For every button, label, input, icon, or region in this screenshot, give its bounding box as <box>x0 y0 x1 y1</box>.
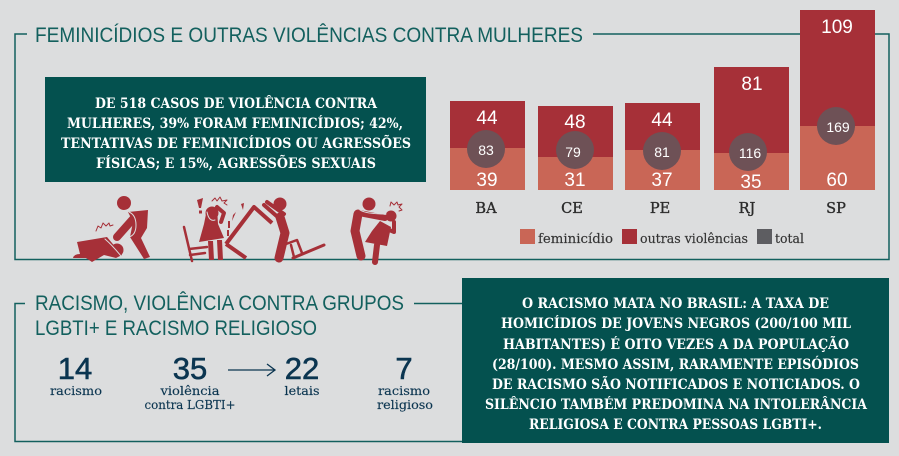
heading: feminicídios: FEMINICÍDIOS E OUTRAS VIOLÊNCIAS CONTRA MULHERES <box>35 24 583 47</box>
callout: o racismo mata: (28/100). MESMO ASSIM, RARAMENTE EPISÓDIOS <box>492 356 859 373</box>
stat: violência contra LGBTI+: contra LGBTI+ <box>144 397 236 412</box>
stat: racismo religioso: racismo <box>378 383 430 398</box>
bar: SP: 60 <box>826 170 848 191</box>
bar: BA: BA <box>475 201 497 217</box>
callout: o racismo mata: HABITANTES) É OITO VEZES A DA POPULAÇÃO <box>503 337 849 353</box>
arrow <box>228 364 275 376</box>
heading: racismo <box>35 292 404 340</box>
legend: feminicídio <box>538 232 613 247</box>
bar: BA: 83 <box>478 142 494 158</box>
stat: letais: letais <box>284 383 320 398</box>
callout: o racismo mata: DE RACISMO SÃO NOTIFICADOS E NOTICIADOS. O <box>492 377 860 393</box>
stat: racismo: racismo <box>50 383 102 398</box>
callout: 518 casos: MULHERES, 39% FORAM FEMINICÍDIOS; 42%, <box>67 116 403 132</box>
bar: CE: 31 <box>564 170 586 191</box>
callout: o racismo mata <box>462 278 889 443</box>
stat: racismo religioso: religioso <box>377 397 433 412</box>
bar: PE: 37 <box>651 170 673 191</box>
stat: violência contra LGBTI+: 35 <box>173 351 207 386</box>
bar: CE <box>538 106 613 217</box>
icon: woman shielding herself behind chair, man throwing table <box>184 197 324 261</box>
icon: man grabbing woman <box>355 198 402 262</box>
heading: racismo: LGBTI+ E RACISMO RELIGIOSO <box>35 317 317 340</box>
callout: o racismo mata: RELIGIOSA E CONTRA PESSOAS LGBTI+. <box>529 417 822 433</box>
bar: CE: 48 <box>564 112 586 133</box>
bar: BA <box>450 101 525 217</box>
callout: 518 casos: TENTATIVAS DE FEMINICÍDIOS OU AGRESSÕES <box>61 136 411 152</box>
bar: PE: PE <box>650 201 670 217</box>
bar: RJ: 116 <box>739 145 761 161</box>
legend: total <box>775 232 804 247</box>
bar: PE <box>625 103 700 217</box>
bar chart <box>450 10 875 217</box>
callout: 518 casos: DE 518 CASOS DE VIOLÊNCIA CONTRA <box>95 96 377 112</box>
callout: 518 casos: FÍSICAS; E 15%, AGRESSÕES SEXUAIS <box>96 156 376 172</box>
bar: PE: 81 <box>654 144 670 160</box>
bar: BA: 39 <box>476 170 498 191</box>
bar: CE: 79 <box>565 144 581 160</box>
stat: racismo religioso: 7 <box>395 351 413 386</box>
callout: o racismo mata: O RACISMO MATA NO BRASIL: A TAXA DE <box>522 296 829 312</box>
bar: PE: 44 <box>651 110 673 131</box>
bar: RJ: 81 <box>741 74 763 95</box>
bar: SP: 169 <box>826 119 850 135</box>
heading: racismo: RACISMO, VIOLÊNCIA CONTRA GRUPOS <box>35 292 404 315</box>
icon: man kicking kneeling woman <box>73 196 150 262</box>
stat: letais: 22 <box>285 351 319 386</box>
stat: racismo: 14 <box>58 351 92 386</box>
stat: violência contra LGBTI+ <box>144 351 236 412</box>
legend <box>520 229 804 247</box>
bar: RJ: 35 <box>740 172 762 193</box>
legend: outras violências <box>640 232 748 247</box>
stat: racismo <box>50 351 102 398</box>
bar: RJ: RJ <box>739 201 756 217</box>
bar: SP <box>800 10 875 217</box>
bar: RJ <box>714 67 789 217</box>
stat: racismo religioso <box>377 351 433 412</box>
callout: o racismo mata: SILÊNCIO TAMBÉM PREDOMINA NA INTOLERÂNCIA <box>485 397 867 413</box>
bar: BA: 44 <box>476 108 498 129</box>
bar: SP: 109 <box>821 17 853 38</box>
bar: CE: CE <box>561 201 583 217</box>
callout: o racismo mata: HOMICÍDIOS DE JOVENS NEGROS (200/100 MIL <box>501 316 851 332</box>
stat: violência contra LGBTI+: violência <box>159 383 220 398</box>
bar: SP: SP <box>826 201 846 217</box>
callout: 518 casos <box>45 77 426 182</box>
